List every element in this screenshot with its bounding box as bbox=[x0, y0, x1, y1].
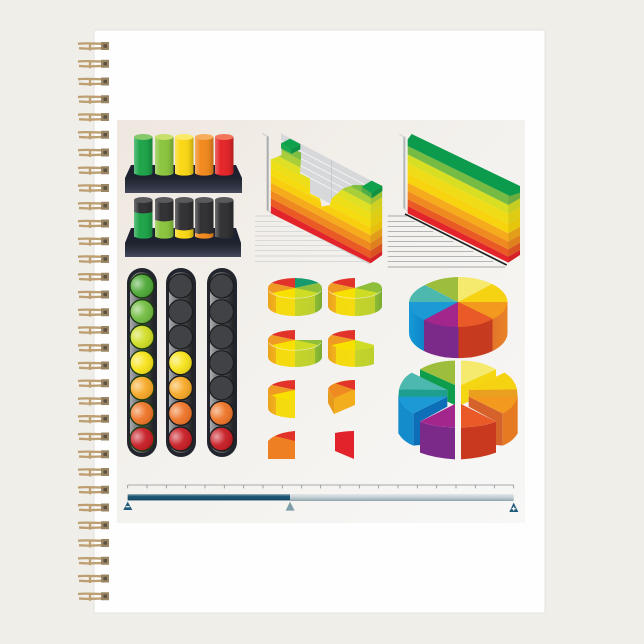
artwork panel bbox=[117, 120, 525, 523]
small pie 4: four slices bbox=[328, 330, 374, 367]
traffic-light strip 1 bbox=[127, 268, 157, 457]
small pie 5: three slices bbox=[268, 380, 295, 418]
slider track bbox=[128, 494, 514, 501]
spiral binding bbox=[78, 42, 109, 601]
large 3D pie chart bbox=[409, 277, 508, 358]
ruler ticks bbox=[128, 485, 514, 488]
traffic-light strip 3 bbox=[207, 268, 237, 457]
small pie 2: five slices bbox=[328, 278, 382, 316]
left axis and floor lines bbox=[255, 133, 370, 264]
traffic-light strip 2 bbox=[166, 268, 196, 457]
exploded 3D pie chart bbox=[398, 361, 518, 459]
layers bbox=[408, 206, 520, 263]
small pie 3: half-plus slices bbox=[268, 330, 322, 367]
left half of exploded pie bbox=[398, 361, 455, 459]
green caps bbox=[281, 139, 300, 149]
shelf chart: partly filled cylinders bbox=[125, 197, 241, 257]
isometric stepped bar chart bbox=[255, 133, 382, 264]
green top bbox=[408, 134, 520, 196]
right half of exploded pie bbox=[461, 361, 518, 459]
small pie 7: orange slice bbox=[268, 431, 295, 459]
notebook page bbox=[94, 30, 545, 613]
progress slider bbox=[123, 485, 518, 512]
back grid bbox=[281, 133, 372, 227]
slider filled part bbox=[128, 494, 290, 500]
marker: middle bbox=[286, 502, 295, 511]
small pie 1: six slices bbox=[268, 278, 322, 316]
small pie 8: red slice bbox=[335, 431, 354, 459]
shelf chart: full cylinders bbox=[125, 134, 242, 193]
marker: plus bbox=[509, 503, 518, 512]
axis and floor lines bbox=[388, 134, 507, 267]
isometric full bar chart bbox=[388, 134, 520, 267]
stacked layers bbox=[271, 137, 382, 263]
small pie 6: two slices bbox=[328, 380, 355, 414]
marker: minus bbox=[123, 502, 132, 510]
